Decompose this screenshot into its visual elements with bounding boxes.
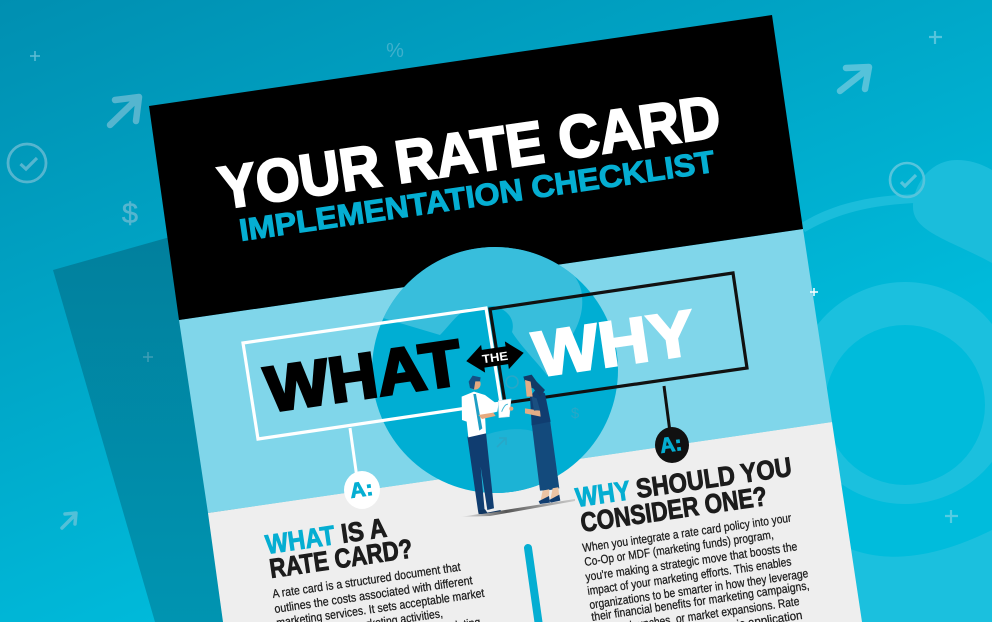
icon: double arrow with THE: THE xyxy=(481,349,509,366)
illustration: man with document xyxy=(462,376,513,514)
icon: plus on back page xyxy=(143,352,153,362)
heading: what is a rate card xyxy=(264,513,414,584)
icon: dollar: $ xyxy=(122,198,138,230)
illustration: ground shadow xyxy=(460,499,575,517)
icon: white sparkle at page edge xyxy=(810,288,818,296)
decorative circle with shapes xyxy=(372,247,618,493)
heading: what is a rate card: RATE CARD? xyxy=(268,533,414,584)
icon: arrow top right xyxy=(840,67,869,91)
back page shadow sheet xyxy=(53,237,260,622)
icon: plus bottom right xyxy=(945,510,958,523)
panel: black title header xyxy=(149,15,803,320)
icon: plus top left xyxy=(30,51,40,61)
icon: check circle left xyxy=(8,144,46,182)
badge: why A xyxy=(655,427,689,463)
icon: plus top right xyxy=(929,31,942,44)
subtitle: implementation checklist: IMPLEMENTATION CHECKLIST xyxy=(237,144,717,248)
heading: why should you consider one: CONSIDER ONE? xyxy=(579,481,769,538)
divider bar xyxy=(528,548,541,622)
connector: what xyxy=(350,428,357,478)
icon: arrow top left xyxy=(110,97,139,125)
badge: why A: A: xyxy=(658,432,683,458)
icon: double arrow with THE xyxy=(464,339,526,375)
text block: why should you consider one xyxy=(581,511,810,622)
text block: why should you consider one: impact of your marketing efforts. This enables xyxy=(586,554,792,598)
text block: why should you consider one: When you integrate a rate card policy into your xyxy=(581,511,792,555)
heading: why should you consider one: WHY SHOULD YOU xyxy=(574,452,794,513)
panel: light blue section xyxy=(179,229,832,513)
heading: WHAT: WHAT xyxy=(261,326,466,426)
text block: why should you consider one: you're making a strategic move that boosts the xyxy=(584,539,798,584)
icon: check circle right xyxy=(890,163,924,197)
panel: infographic page xyxy=(149,15,862,622)
callout box: why xyxy=(490,273,747,403)
badge: what A xyxy=(344,471,380,509)
illustration: woman xyxy=(523,375,560,504)
heading: what is a rate card: WHAT IS A xyxy=(264,513,389,560)
badge: what A: A: xyxy=(348,477,374,503)
background blobs: right side xyxy=(794,160,992,622)
heading: why should you consider one xyxy=(574,452,794,538)
icon: percent: % xyxy=(386,40,404,62)
text block: why should you consider one: Co-Op or MDF (marketing funds) program, xyxy=(583,528,774,569)
callout box: what xyxy=(243,308,501,439)
icon: small arrow bottom left xyxy=(62,513,76,528)
text block: what is a rate card: A rate card is a structured document that xyxy=(271,560,462,601)
title: your rate card: YOUR RATE CARD xyxy=(214,83,725,222)
heading: WHY: WHY xyxy=(529,296,699,391)
text block: why should you consider one: organizations to be smarter in how they leverage xyxy=(588,566,809,612)
decorative circle with shapes: $ xyxy=(571,405,580,422)
text block: what is a rate card: outlines the costs associated with different xyxy=(273,573,474,616)
connector: why xyxy=(664,386,670,432)
panel: grey content section xyxy=(208,422,862,622)
